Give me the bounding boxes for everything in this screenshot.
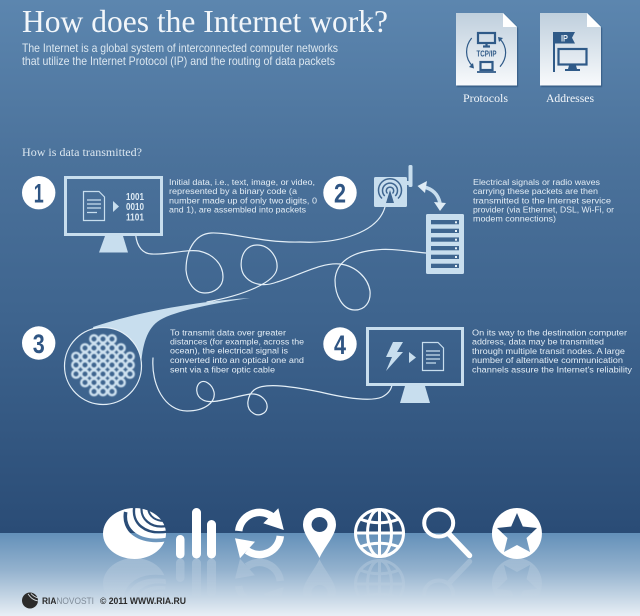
cable: computer to router bbox=[136, 207, 385, 293]
step 1 text: and 1), are assembled into packets bbox=[169, 204, 307, 214]
step 1 text: represented by a binary code (a bbox=[169, 186, 297, 196]
step 2 badge: 2 bbox=[334, 179, 346, 209]
step 2 text: Electrical signals or radio waves bbox=[473, 177, 601, 187]
monitor: data to binary bbox=[66, 178, 162, 252]
step 3 text: distances (for example, across the bbox=[170, 337, 304, 347]
label: protocols: Protocols bbox=[463, 91, 508, 105]
step 1 text: Initial data, i.e., text, image, or video, bbox=[169, 177, 315, 187]
step 1 text: number made up of only two digits, 0 bbox=[169, 195, 317, 205]
binary digits: 1001 bbox=[126, 191, 144, 203]
step 1 badge: 1 bbox=[34, 179, 44, 209]
step 2 text: transmitted to the Internet service bbox=[473, 195, 611, 205]
step 2 text: carrying these packets are then bbox=[473, 186, 598, 196]
step 3 badge: 3 bbox=[33, 329, 45, 359]
document icon: protocols bbox=[456, 13, 518, 87]
document icon: addresses: IP bbox=[561, 34, 568, 44]
step 4 text: number of alternative communication bbox=[472, 355, 623, 365]
step 4 text: channels assure the Internet's reliability bbox=[472, 364, 633, 374]
step 3 fiber illustration bbox=[64, 298, 250, 404]
cable: fiber to destination computer bbox=[153, 358, 392, 415]
title: How does the Internet work? bbox=[22, 3, 388, 39]
step 4 text bbox=[472, 328, 633, 374]
binary digits: 0010 bbox=[126, 201, 144, 213]
service icons row bbox=[103, 508, 542, 559]
step 4 badge: 4 bbox=[334, 330, 346, 360]
step 3 text: sent via a fiber optic cable bbox=[170, 364, 275, 374]
document icon bbox=[422, 342, 444, 370]
reflective floor bbox=[0, 533, 640, 616]
subtitle: that utilize the Internet Protocol (IP) and the routing of data packets bbox=[22, 54, 335, 68]
step 3 text bbox=[170, 328, 304, 374]
step 4 text: through multiple transit nodes. A large bbox=[472, 346, 625, 356]
step 1 badge bbox=[22, 176, 55, 209]
cable: server to fiber wedge bbox=[207, 245, 426, 310]
double arrow bbox=[418, 181, 446, 211]
icon reflections bbox=[104, 558, 542, 581]
step 2 badge bbox=[323, 176, 357, 209]
document icon: protocols: TCP/IP bbox=[476, 49, 497, 59]
document icon bbox=[84, 192, 104, 220]
step 2 text: provider (via Ethernet, DSL, Wi-Fi, or bbox=[473, 205, 614, 215]
step 3 text: To transmit data over greater bbox=[170, 328, 286, 338]
step 1 text bbox=[169, 177, 317, 214]
lightning bolt bbox=[386, 342, 403, 371]
fiber bundle bbox=[72, 335, 134, 395]
subtitle bbox=[22, 41, 338, 68]
step 2 text bbox=[473, 177, 614, 224]
monitor: signal to document bbox=[368, 328, 462, 403]
server rack bbox=[426, 214, 464, 274]
binary digits bbox=[126, 191, 144, 224]
step 3 text: ocean), the electrical signal is bbox=[170, 346, 289, 356]
label: addresses: Addresses bbox=[546, 91, 594, 105]
binary digits: 1101 bbox=[126, 212, 144, 224]
step 2 text: modem connections) bbox=[473, 214, 556, 224]
subtitle: The Internet is a global system of interconnected computer networks bbox=[22, 41, 338, 55]
step 3 text: converted into an optical one and bbox=[170, 355, 304, 365]
document icon: addresses bbox=[540, 13, 602, 87]
step 4 badge bbox=[323, 327, 357, 361]
RIA Novosti logo: RIANOVOSTI bbox=[42, 596, 94, 607]
step 3 badge bbox=[22, 326, 55, 360]
section heading: How is data transmitted? bbox=[22, 147, 142, 159]
router icon bbox=[374, 165, 412, 207]
RIA Novosti logo: © 2011 WWW.RIA.RU bbox=[100, 596, 186, 607]
step 4 text: On its way to the destination computer bbox=[472, 328, 627, 338]
step 4 text: address, data may be transmitted bbox=[472, 337, 604, 347]
RIA Novosti logo bbox=[22, 592, 186, 608]
